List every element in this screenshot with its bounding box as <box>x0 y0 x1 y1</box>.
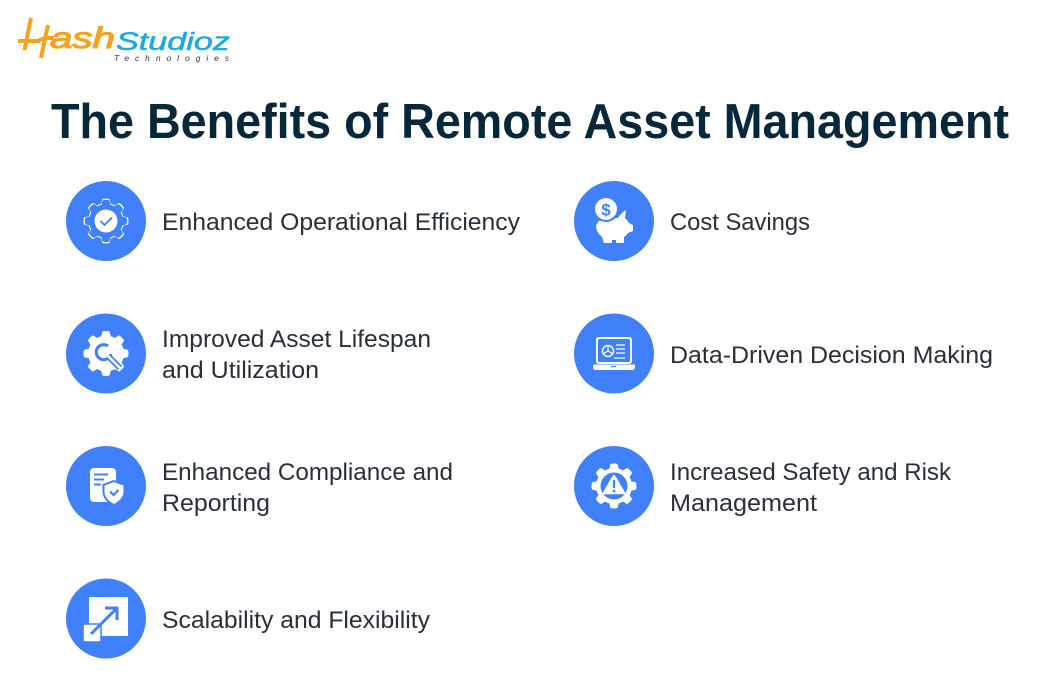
label: Data-Driven Decision Making <box>670 342 993 369</box>
item: Scalability and Flexibility <box>66 578 430 658</box>
item: Increased Safety and Risk Management <box>574 446 952 526</box>
label: Scalability and Flexibility <box>162 607 430 634</box>
label: Enhanced Compliance and <box>162 459 453 486</box>
label line 2: Reporting <box>162 490 270 517</box>
label: Increased Safety and Risk <box>670 459 952 486</box>
logo tagline: Technologies <box>114 53 230 63</box>
icon: gear with wrench <box>66 314 146 394</box>
icon: piggy bank with coin <box>574 181 654 261</box>
item: Enhanced Operational Efficiency <box>66 181 520 261</box>
icon: piggy bank with coin: $ <box>601 200 611 220</box>
logo <box>18 18 230 63</box>
item: Enhanced Compliance and Reporting <box>66 446 453 526</box>
icon: document with shield <box>66 446 146 526</box>
icon: gear with warning <box>574 446 654 526</box>
logo mark: H <box>18 18 54 58</box>
label line 2: and Utilization <box>162 357 319 384</box>
logo wordmark: ash: ash <box>50 21 115 55</box>
icon: laptop with dashboard <box>574 314 654 394</box>
label: Enhanced Operational Efficiency <box>162 209 520 236</box>
title: The Benefits of Remote Asset Management <box>51 95 1009 149</box>
item: Cost Savings <box>574 181 810 261</box>
item: Data-Driven Decision Making <box>574 314 993 394</box>
icon: gear with check <box>66 181 146 261</box>
logo wordmark: Studioz: Studioz <box>116 28 230 56</box>
label: Improved Asset Lifespan <box>162 326 431 353</box>
label: Cost Savings <box>670 209 810 236</box>
item: Improved Asset Lifespan and Utilization <box>66 314 431 394</box>
icon: expand arrow <box>66 578 146 658</box>
label line 2: Management <box>670 490 817 517</box>
